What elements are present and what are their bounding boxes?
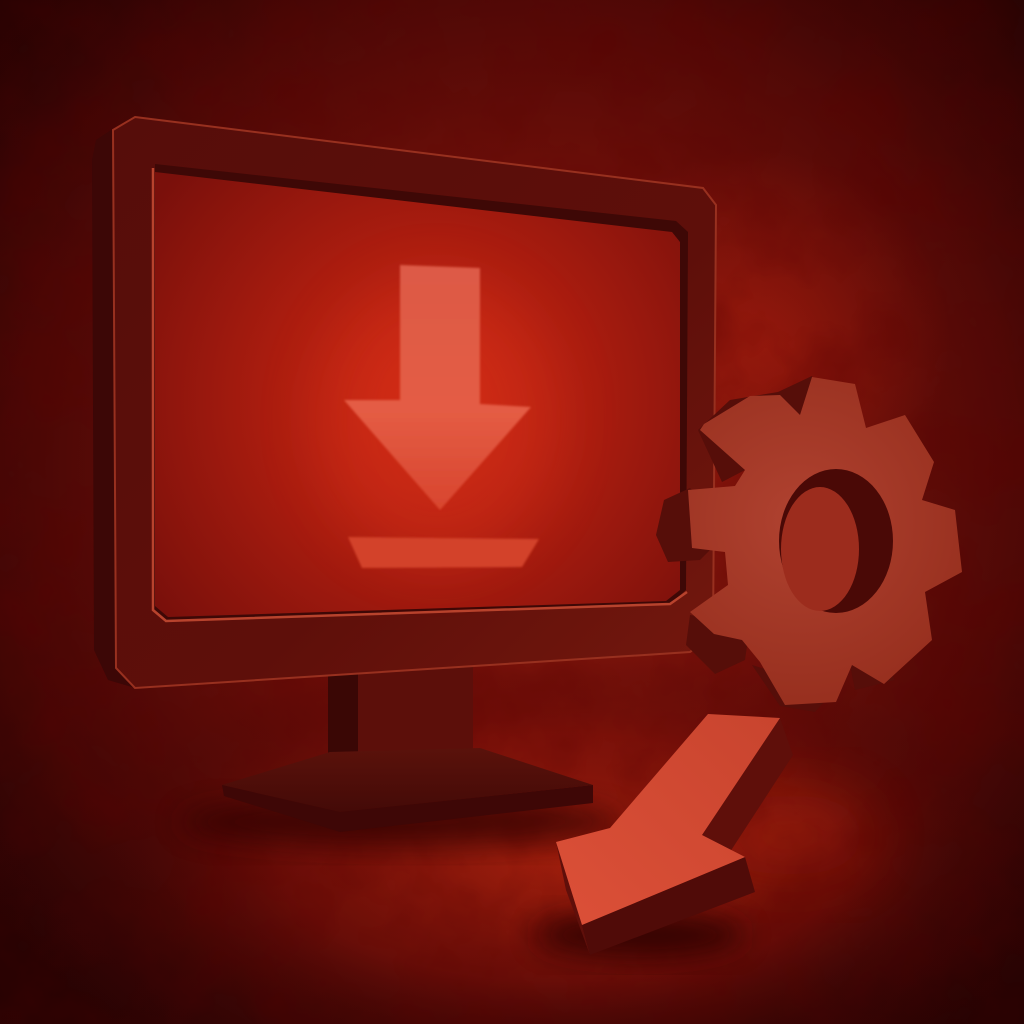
icon: gear <box>656 376 962 712</box>
screen bezel <box>154 164 688 621</box>
monitor <box>92 117 716 688</box>
monitor stand and base <box>180 666 620 846</box>
stand base <box>222 748 593 832</box>
icon: fallen arrow <box>535 714 793 957</box>
gear front face <box>688 377 962 705</box>
screen <box>155 172 680 617</box>
arrow shadow <box>535 913 745 957</box>
icon: download arrow <box>344 265 531 510</box>
monitor frame <box>113 117 716 688</box>
gear hole inner <box>781 487 859 611</box>
icon: glow behind download arrow <box>318 280 558 560</box>
base shadow <box>180 798 620 846</box>
gear side depth <box>656 376 895 712</box>
monitor left side <box>92 128 135 688</box>
arrow front face <box>556 714 780 925</box>
arrow side faces <box>702 718 793 852</box>
stand neck <box>328 666 473 756</box>
gear hole shadow <box>779 469 893 613</box>
icon: download tray bar <box>348 537 539 568</box>
